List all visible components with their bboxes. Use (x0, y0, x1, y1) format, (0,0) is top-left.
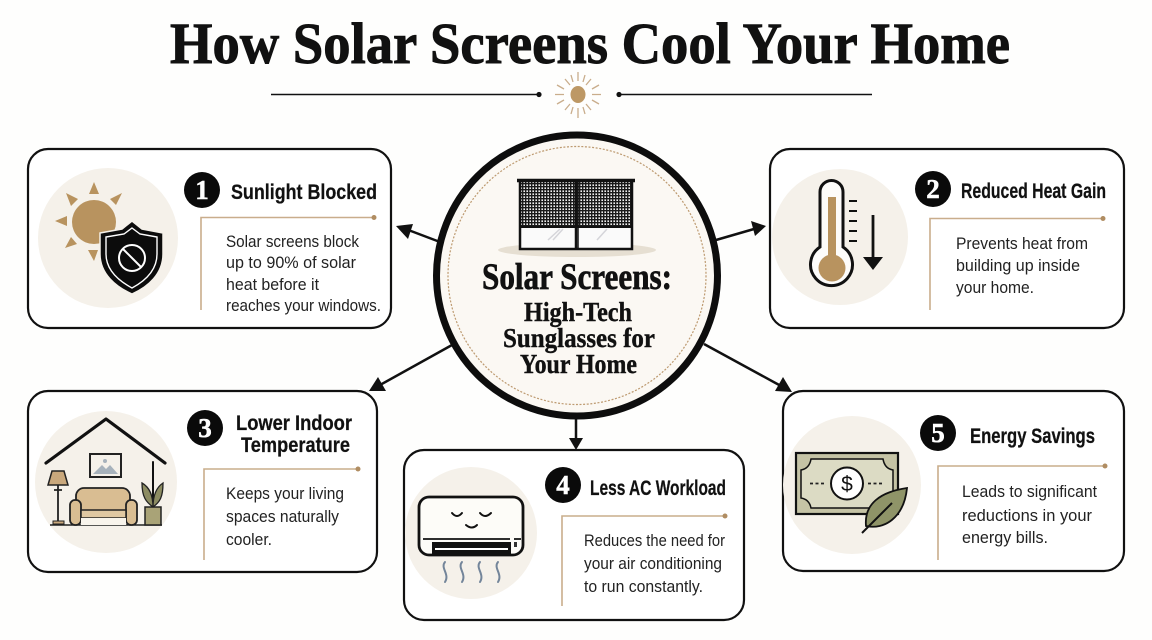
text: lower indoor temperature: spaces naturally (226, 508, 340, 526)
center heading: Solar Screens: (482, 257, 672, 298)
heading: lower indoor temperature: Lower Indoor (236, 411, 353, 435)
rule (201, 215, 376, 310)
text: less AC workload: to run constantly. (584, 578, 703, 596)
heading: lower indoor temperature: Temperature (241, 433, 350, 457)
center subheading: High-Tech (524, 297, 632, 327)
text: sunlight blocked (226, 233, 381, 315)
center subheading: Your Home (520, 349, 637, 379)
badge 5: 5 (931, 418, 945, 448)
text: reduced heat gain: your home. (956, 279, 1034, 297)
arrowhead: card 4 (569, 438, 583, 450)
text: energy savings: reductions in your (962, 507, 1092, 525)
panel: reduced heat gain (770, 149, 1124, 328)
center subheading (503, 297, 655, 379)
center subheading: Sunglasses for (503, 323, 655, 353)
badge 3: 3 (198, 413, 212, 443)
icon: thermometer (810, 180, 883, 286)
text: reduced heat gain: building up inside (956, 257, 1080, 275)
badge 1 (184, 172, 220, 208)
text: energy savings: Leads to significant (962, 483, 1097, 501)
icon: solar screen window (498, 180, 656, 257)
badge 4 (545, 467, 581, 503)
text: less AC workload: Reduces the need for (584, 532, 725, 550)
icon: air conditioner (419, 497, 523, 582)
arrow: center to card 5 (704, 344, 781, 386)
text: lower indoor temperature: Keeps your living (226, 485, 344, 503)
text: energy savings: energy bills. (962, 529, 1048, 547)
icon: living room (46, 419, 165, 525)
panel: energy savings (783, 391, 1124, 571)
text: reduced heat gain (956, 235, 1088, 297)
arrow: center to card 4 (575, 418, 577, 440)
arrowhead: card 5 (775, 377, 792, 392)
text: sunlight blocked: reaches your windows. (226, 297, 381, 315)
text: sunlight blocked: heat before it (226, 276, 319, 294)
badge 2 (915, 171, 951, 207)
badge 3 (187, 410, 223, 446)
badge 1: 1 (195, 175, 209, 205)
badge 2: 2 (926, 174, 940, 204)
badge 4: 4 (556, 470, 570, 500)
panel: less AC workload (404, 450, 744, 620)
heading: lower indoor temperature (236, 411, 353, 457)
arrowhead: card 3 (369, 377, 386, 391)
arrowhead: card 2 (751, 221, 766, 236)
text: less AC workload (584, 532, 725, 596)
arrowhead: card 1 (396, 224, 413, 239)
text: energy savings (962, 483, 1097, 547)
rule (930, 216, 1106, 310)
icon: banknote and leaf: $ (841, 473, 853, 496)
rule (938, 464, 1108, 560)
text: lower indoor temperature (226, 485, 344, 549)
center circle (436, 135, 718, 416)
arrow: center to card 1 (407, 230, 440, 242)
text: less AC workload: your air conditioning (584, 555, 722, 573)
arrow: center to card 3 (380, 345, 452, 385)
text: sunlight blocked: Solar screens block (226, 233, 360, 251)
heading: energy savings: Energy Savings (970, 424, 1095, 448)
icon: sun and shield (55, 182, 163, 294)
badge 5 (920, 415, 956, 451)
text: sunlight blocked: up to 90% of solar (226, 254, 356, 272)
text: reduced heat gain: Prevents heat from (956, 235, 1088, 253)
rule (204, 466, 360, 560)
panel: sunlight blocked (28, 149, 391, 328)
rule (562, 514, 728, 606)
heading: less AC workload: Less AC Workload (590, 476, 726, 500)
title divider with sun (271, 72, 872, 118)
heading: sunlight blocked: Sunlight Blocked (231, 180, 377, 204)
arrow: center to card 2 (716, 229, 754, 240)
title: How Solar Screens Cool Your Home (170, 11, 1010, 76)
panel: lower indoor temperature (28, 391, 377, 572)
icon: banknote and leaf (796, 453, 907, 533)
text: lower indoor temperature: cooler. (226, 531, 272, 549)
